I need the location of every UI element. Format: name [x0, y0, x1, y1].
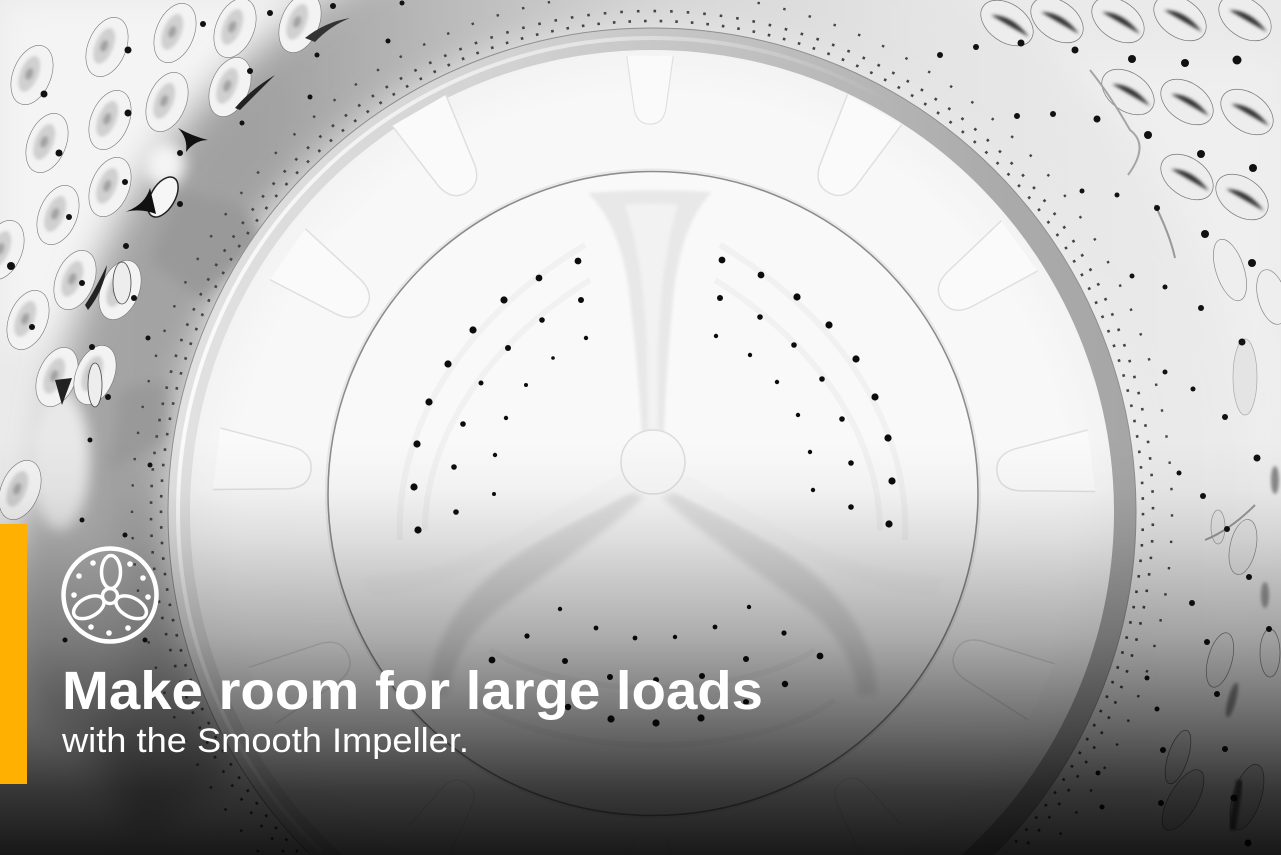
icon: impeller in a circle	[64, 548, 156, 642]
impeller hub	[621, 430, 685, 494]
subheading: with the Smooth Impeller.	[61, 722, 469, 760]
white wash basket ring	[190, 50, 1114, 855]
dark bottom gradient overlay	[0, 440, 1281, 855]
impeller vanes	[360, 190, 946, 695]
yellow accent bar	[0, 524, 27, 784]
impeller water holes	[410, 257, 896, 727]
drum rim	[168, 28, 1136, 855]
heading: Make room for large loads	[62, 661, 763, 721]
drum dimples: right side	[972, 0, 1281, 836]
impeller disc	[326, 170, 980, 818]
drum dimples: left side	[0, 0, 350, 526]
basket ring fins	[213, 56, 1095, 853]
